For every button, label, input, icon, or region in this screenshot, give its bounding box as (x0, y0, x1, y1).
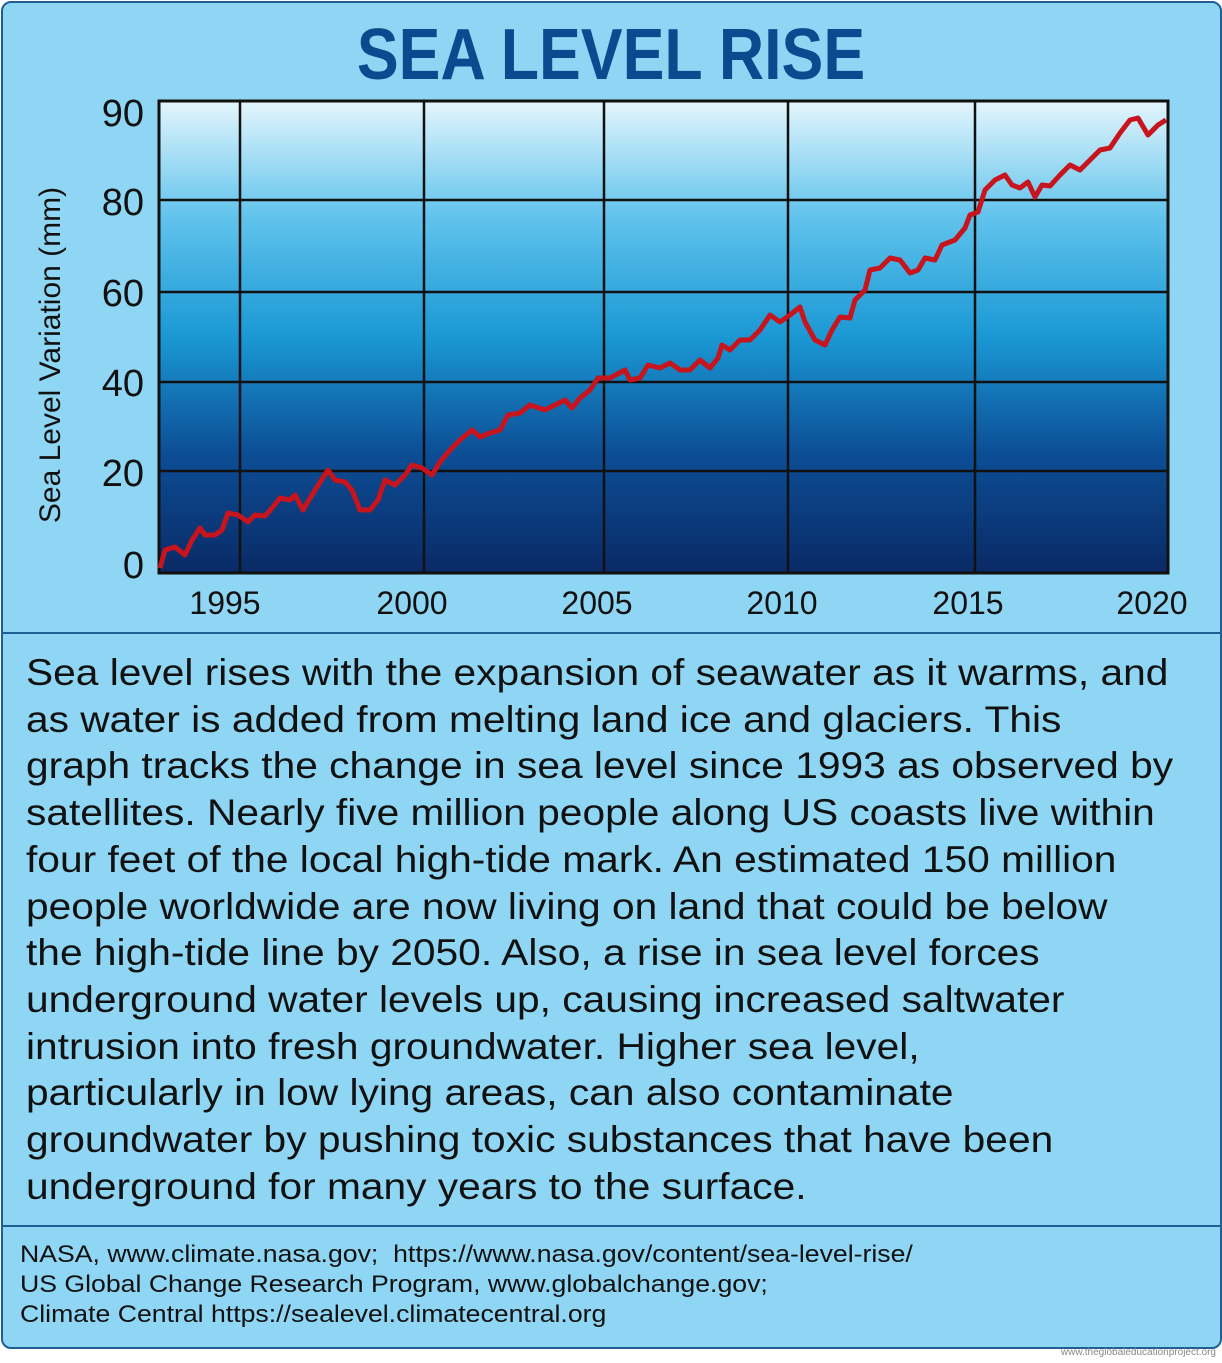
body text: satellites. Nearly five million people along US coasts live within (26, 792, 1155, 833)
data line (160, 118, 1166, 568)
y axis labels (102, 93, 144, 587)
body text (26, 652, 1173, 1207)
y axis labels: 40 (102, 363, 144, 405)
x axis labels: 2000 (376, 585, 448, 621)
body text: underground for many years to the surface. (26, 1166, 807, 1207)
body text: particularly in low lying areas, can also contaminate (26, 1072, 954, 1113)
body text: intrusion into fresh groundwater. Higher sea level, (26, 1026, 920, 1067)
body text: graph tracks the change in sea level since 1993 as observed by (26, 745, 1173, 786)
x axis labels: 2015 (932, 585, 1004, 621)
sources: Climate Central https://sealevel.climatecentral.org (20, 1301, 606, 1328)
body text: as water is added from melting land ice and glaciers. This (26, 699, 1061, 740)
y axis labels: 60 (102, 273, 144, 315)
chart (34, 93, 1188, 621)
body text: four feet of the local high-tide mark. An estimated 150 million (26, 839, 1116, 880)
y axis labels: 90 (102, 93, 144, 135)
y axis title: Sea Level Variation (mm) (34, 187, 67, 523)
body text: underground water levels up, causing increased saltwater (26, 979, 1064, 1020)
title: SEA LEVEL RISE (357, 15, 865, 95)
x axis labels: 2005 (561, 585, 633, 621)
y axis labels: 80 (102, 182, 144, 224)
credit: www.theglobaleducationproject.org (1061, 1347, 1216, 1358)
sources: NASA, www.climate.nasa.gov; https://www.nasa.gov/content/sea-level-rise/ (20, 1241, 913, 1268)
x axis labels: 1995 (189, 585, 261, 621)
x axis labels: 2020 (1116, 585, 1188, 621)
sources: US Global Change Research Program, www.globalchange.gov; (20, 1271, 768, 1298)
x axis labels (189, 585, 1188, 621)
y axis labels: 0 (123, 545, 144, 587)
y axis labels: 20 (102, 453, 144, 495)
x axis labels: 2010 (746, 585, 818, 621)
body text: Sea level rises with the expansion of seawater as it warms, and (26, 652, 1168, 693)
body text: groundwater by pushing toxic substances that have been (26, 1119, 1053, 1160)
body text: the high-tide line by 2050. Also, a rise in sea level forces (26, 932, 1040, 973)
body text: people worldwide are now living on land that could be below (26, 886, 1108, 927)
sources (20, 1241, 913, 1328)
